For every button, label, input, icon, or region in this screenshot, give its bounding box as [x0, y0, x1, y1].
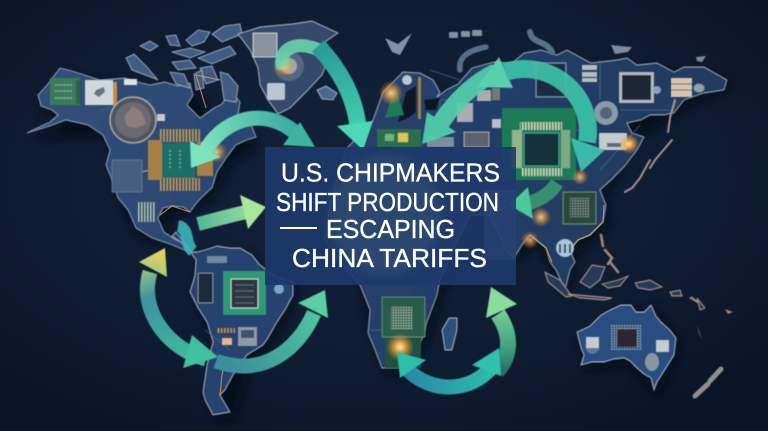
chips: Europe: [377, 75, 421, 147]
heat sinks: [457, 88, 500, 122]
lens dome: [274, 51, 304, 81]
gray processor: [619, 72, 654, 103]
disc: [274, 284, 284, 294]
chips: North America: [50, 78, 227, 222]
coastline highlights: [112, 75, 604, 395]
continent: Eurasia and Africa: [325, 50, 727, 368]
oval component: [645, 353, 659, 371]
striped connector: [137, 202, 156, 222]
dark module: [198, 273, 213, 303]
white module: [656, 340, 669, 352]
pin row: [427, 137, 454, 147]
gray square: [253, 33, 277, 57]
continent: Australia: [577, 305, 676, 390]
heat sink stack: [582, 65, 597, 82]
arctic islands: [126, 24, 242, 102]
chips: Africa: [382, 297, 425, 368]
striped module: [671, 78, 692, 97]
continent: Greenland: [238, 21, 338, 114]
gray block: [112, 160, 142, 192]
island: Arctic Russia: [611, 45, 706, 62]
title panel: [265, 147, 516, 285]
chips: Greenland: [253, 33, 304, 100]
green chip: [50, 78, 80, 105]
islands: Pacific: [697, 309, 733, 340]
chips: South America: [198, 256, 284, 346]
sphere: [653, 86, 661, 94]
island: Svalbard arc: [460, 47, 486, 70]
title line 3 dash: [280, 227, 317, 229]
glow: South Africa: [386, 333, 414, 361]
chips: Australia: [586, 325, 669, 371]
silver coin: [110, 97, 156, 143]
arrow: Asia big arc right: [505, 69, 605, 172]
white module: [586, 337, 599, 354]
gold bar: [418, 77, 421, 119]
glow: Scandinavia: [379, 81, 403, 105]
glow: East China: [572, 169, 588, 185]
badge icon: [556, 239, 574, 257]
header strip: [207, 256, 227, 263]
title line 1: U.S. CHIPMAKERS: [281, 158, 500, 188]
continent: North America: [27, 68, 256, 252]
panel tint: right edge: [484, 190, 516, 260]
island: Iceland: [317, 86, 337, 100]
chips: Asia: [427, 63, 704, 257]
arrow: Caribbean band: [178, 226, 193, 251]
glow: East Asia: [619, 134, 639, 154]
main chip: [382, 297, 425, 337]
islands: Indonesia: [545, 265, 705, 310]
islands: north Atlantic: [385, 30, 482, 55]
arrow: Greenland hook: [282, 46, 327, 68]
tan component: [222, 338, 232, 345]
sphere: [402, 75, 412, 85]
screen module: [238, 327, 257, 346]
island: Novaya Zemlya: [530, 32, 552, 52]
island: Madagascar: [442, 318, 457, 350]
white chip: [85, 80, 117, 106]
glow: south China: [531, 207, 551, 227]
small square: [492, 119, 501, 128]
orange strip: [217, 328, 235, 333]
sphere: [694, 84, 704, 92]
island: Japan and Sakhalin: [625, 100, 675, 192]
title line 2: SHIFT PRODUCTION: [276, 187, 499, 217]
southeast Asia chip: [563, 192, 596, 224]
dark gaps: Baltic and Scandinavia: [398, 86, 440, 122]
arrow: South America left arc: [139, 248, 218, 368]
arrow: Africa lower arc: [397, 348, 501, 387]
large gold pin chip: [148, 129, 213, 191]
arrow: Greenland to Europe: [318, 46, 373, 150]
arrow: Asia short: [509, 183, 557, 219]
central chip: [611, 325, 642, 351]
arrow: North America double-headed: [190, 118, 315, 168]
title line 3: ESCAPING: [326, 214, 455, 244]
circuit traces: [100, 60, 670, 350]
title line 4: CHINA TARIFFS: [292, 243, 487, 273]
arrow: Africa upward arc: [486, 287, 517, 372]
green board: [377, 86, 421, 147]
arrow: Atlantic: [198, 195, 266, 229]
small white module: [124, 79, 137, 85]
glow: Bay of Bengal: [521, 231, 539, 249]
glow: [274, 56, 294, 76]
round dome: [594, 101, 618, 125]
arrow: Asia big arc left: [422, 57, 513, 144]
white box: [599, 133, 627, 150]
island: New Zealand: [695, 369, 721, 396]
green chip: [223, 271, 266, 315]
panel: translucent backdrop: [265, 147, 516, 285]
dark chip: [536, 63, 566, 97]
arrow: South America right arc: [216, 290, 328, 366]
continent drop shadows: [32, 69, 732, 421]
glow: US east coast: [205, 141, 227, 163]
big green chip: [502, 108, 576, 180]
white box: [267, 83, 285, 100]
gray box: [464, 132, 489, 147]
small component: [157, 114, 165, 121]
lower board: [385, 335, 421, 368]
islands: Philippines: [601, 235, 618, 272]
continent: South America: [172, 232, 293, 415]
panel tint: circuit glow: [330, 155, 440, 275]
